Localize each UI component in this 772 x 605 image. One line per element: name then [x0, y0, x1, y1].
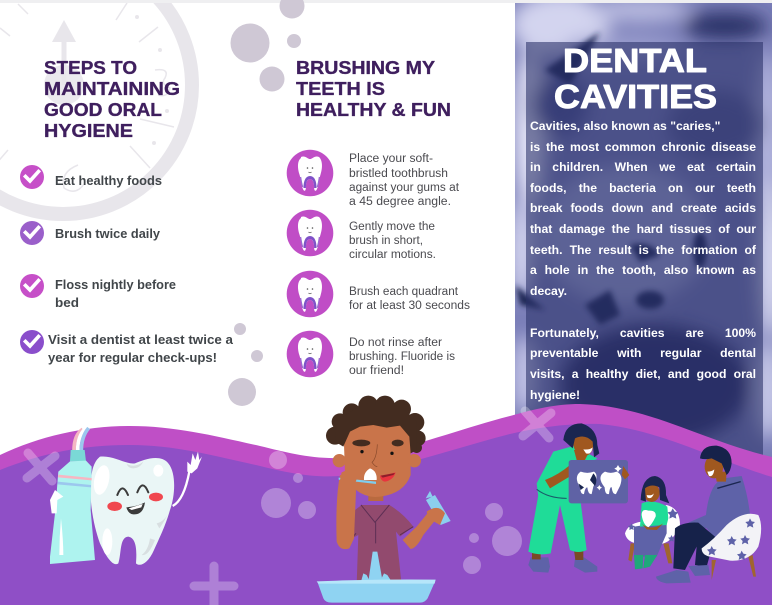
illustration: dentist and family: [528, 423, 761, 583]
heading: brushing: HEALTHY & FUN: [296, 99, 451, 120]
text: cavities description: that damage the hard tissues of our: [530, 222, 756, 236]
item: visit a dentist: year for regular check-ups!: [48, 350, 217, 365]
magenta wave: [0, 404, 772, 605]
heading: brushing: TEETH IS: [296, 78, 385, 99]
face details: [352, 440, 370, 446]
text: cavities description: preventable with regular dental: [530, 346, 756, 360]
step 1: against your gums at: [349, 182, 460, 194]
heading: steps: MAINTAINING: [44, 78, 180, 99]
step 3: Brush each quadrant: [349, 286, 459, 298]
child on chair: [625, 476, 680, 569]
basin and water: [317, 552, 436, 603]
step 2: Gently move the: [349, 221, 435, 233]
top strip: [0, 0, 772, 3]
text: cavities description: in children. When we eat certain: [530, 160, 756, 174]
illustration: tooth and toothpaste: [50, 428, 202, 565]
purple wave: [0, 424, 772, 605]
arms: [336, 475, 356, 549]
toothpaste tube: [50, 450, 95, 564]
text: cavities description: decay.: [530, 284, 567, 298]
text: cavities description: visits, a healthy diet, and good oral: [530, 367, 756, 381]
x-ray board: [569, 460, 629, 503]
step 4: [287, 331, 455, 377]
text: cavities description: hygiene!: [530, 388, 580, 402]
toothpaste stripe: [74, 428, 89, 451]
step 1: Place your soft-: [349, 153, 433, 165]
step 2: [287, 210, 436, 261]
clock watermark: [0, 0, 192, 214]
step 1: a 45 degree angle.: [349, 196, 451, 208]
item: floss nightly: [20, 274, 176, 310]
heading: brushing: BRUSHING MY: [296, 57, 436, 78]
dentist: [528, 423, 599, 573]
step 3: for at least 30 seconds: [349, 300, 470, 312]
text: cavities description: foods, the bacteria on our teeth: [530, 181, 756, 195]
heading: steps: [44, 57, 180, 141]
text: cavities description: teeth. The result is the formation of: [530, 243, 756, 257]
title: dental cavities: CAVITIES: [554, 78, 717, 115]
item: brush twice daily: Brush twice daily: [55, 226, 161, 241]
bubbles: [261, 451, 522, 574]
shirt: [351, 505, 413, 585]
item: visit a dentist: [20, 330, 234, 365]
decorative circles: [228, 0, 304, 406]
heading: steps: GOOD ORAL: [44, 99, 162, 120]
step 1: bristled toothbrush: [349, 168, 448, 180]
step 2: brush in short,: [349, 235, 423, 247]
text: cavities description: Fortunately, cavities are 100%: [530, 326, 756, 340]
item: floss nightly: bed: [55, 295, 79, 310]
text overlay panel: [526, 42, 763, 472]
toothbrush and foam: [339, 478, 376, 484]
brushing steps: [287, 150, 470, 377]
text: cavities description: is the most common chronic disease: [530, 140, 756, 154]
father on chair: [656, 446, 761, 583]
text: cavities description: break foods down and create acids: [530, 201, 756, 215]
step 2: circular motions.: [349, 249, 436, 261]
checklist: [20, 165, 234, 365]
crosses: [27, 411, 551, 605]
item: eat healthy foods: [20, 165, 162, 189]
step 4: our friend!: [349, 365, 404, 377]
neck: [368, 493, 383, 501]
heading: steps: HYGIENE: [44, 120, 133, 141]
step 4: brushing. Fluoride is: [349, 351, 455, 363]
toothpaste in hand: [426, 491, 451, 525]
panel: photo background: [510, 0, 772, 483]
item: eat healthy foods: Eat healthy foods: [55, 173, 162, 188]
heading: steps: STEPS TO: [44, 57, 137, 78]
item: brush twice daily: [20, 221, 161, 245]
text: cavities description: Cavities, also known as "caries,": [530, 119, 720, 133]
head: [343, 425, 411, 497]
illustration: boy brushing teeth: [317, 396, 451, 603]
hair: [326, 396, 426, 453]
step 1: [287, 150, 460, 208]
text: cavities description: a hole in the tooth, also known as: [530, 263, 756, 277]
title: dental cavities: [554, 42, 717, 115]
heading: brushing: [296, 57, 451, 120]
item: visit a dentist: Visit a dentist at least twice a: [48, 332, 234, 347]
title: dental cavities: DENTAL: [563, 42, 707, 79]
step 3: [287, 271, 470, 317]
item: floss nightly: Floss nightly before: [55, 277, 176, 292]
step 4: Do not rinse after: [349, 337, 442, 349]
text: cavities description: [530, 119, 756, 402]
tooth mascot: [91, 452, 202, 565]
